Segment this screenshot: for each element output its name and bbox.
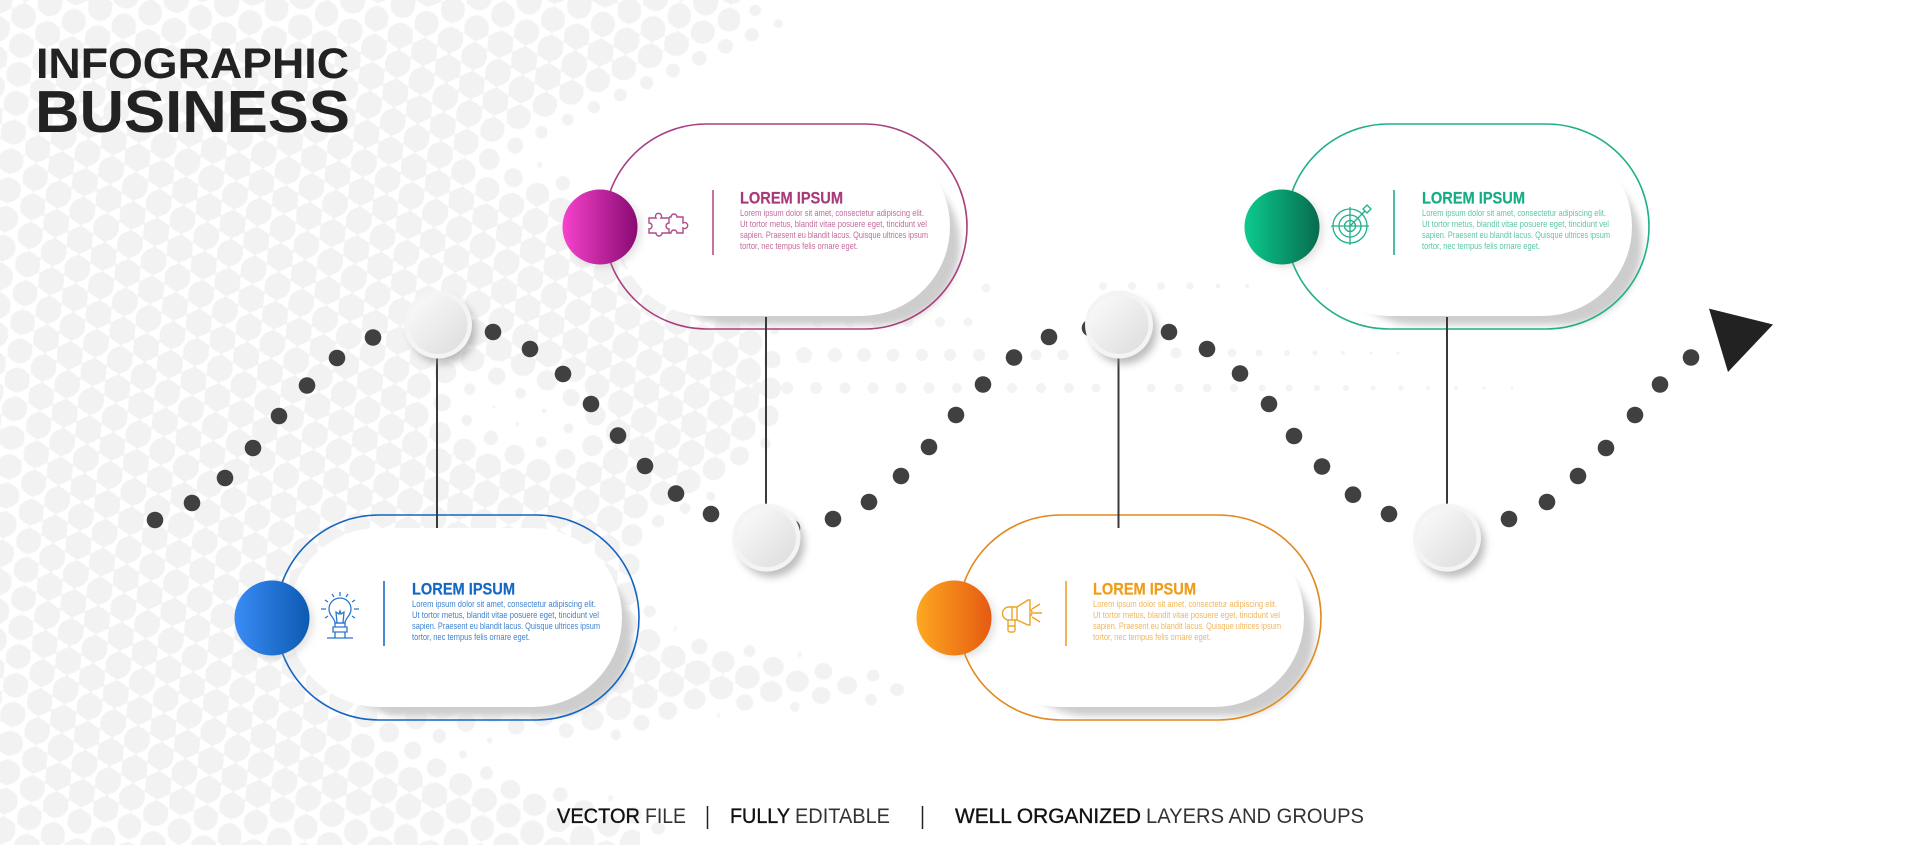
panel: blue card	[234, 515, 639, 720]
panel: blue card: Lorem ipsum dolor sit amet, consectetur adipiscing elit.	[412, 599, 596, 610]
title	[35, 41, 350, 145]
footer caption: LAYERS AND GROUPS	[1146, 805, 1364, 828]
panel: orange card: sapien. Praesent eu blandit lacus. Quisque ultrices ipsum	[1093, 621, 1281, 632]
panel: blue card: Ut tortor metus, blandit vitae posuere eget, tincidunt vel	[412, 610, 599, 621]
panel: green card: sapien. Praesent eu blandit lacus. Quisque ultrices ipsum	[1422, 230, 1610, 241]
footer caption: VECTOR	[557, 805, 640, 828]
panel: orange card: LOREM IPSUM	[1093, 580, 1196, 598]
arrow head	[1709, 309, 1773, 372]
timeline node 1	[404, 290, 476, 364]
panel: orange card	[916, 515, 1321, 720]
connector lines	[437, 317, 1447, 528]
footer caption: EDITABLE	[795, 805, 890, 828]
footer caption: FULLY	[730, 805, 790, 828]
panel: pink card: Ut tortor metus, blandit vitae posuere eget, tincidunt vel	[740, 219, 927, 230]
panel: green card: LOREM IPSUM	[1422, 188, 1525, 208]
panel: pink card: LOREM IPSUM	[740, 188, 843, 208]
panel: blue card: LOREM IPSUM	[412, 580, 515, 598]
center halftone rows	[721, 282, 1514, 394]
dotted path	[147, 320, 1699, 536]
panel: pink card: sapien. Praesent eu blandit lacus. Quisque ultrices ipsum	[740, 230, 928, 241]
footer caption: FILE	[645, 805, 686, 828]
panel: green card	[1244, 124, 1649, 329]
panel: blue card: tortor, nec tempus felis ornare eget.	[412, 632, 530, 643]
timeline node 3	[1085, 290, 1157, 364]
panel: pink card: Lorem ipsum dolor sit amet, consectetur adipiscing elit.	[740, 208, 924, 219]
panel: orange card: Lorem ipsum dolor sit amet, consectetur adipiscing elit.	[1093, 599, 1277, 610]
panel: pink card	[562, 124, 967, 329]
timeline node 2	[732, 504, 804, 577]
panel: green card: Lorem ipsum dolor sit amet, consectetur adipiscing elit.	[1422, 208, 1606, 219]
footer caption: WELL ORGANIZED	[955, 805, 1141, 828]
title: INFOGRAPHIC	[36, 41, 349, 88]
panel: blue card: sapien. Praesent eu blandit lacus. Quisque ultrices ipsum	[412, 621, 600, 632]
timeline node 4	[1413, 504, 1485, 577]
panel: orange card: tortor, nec tempus felis ornare eget.	[1093, 632, 1211, 643]
panel: green card: Ut tortor metus, blandit vitae posuere eget, tincidunt vel	[1422, 219, 1609, 230]
panel: orange card: Ut tortor metus, blandit vitae posuere eget, tincidunt vel	[1093, 610, 1280, 621]
footer caption	[557, 805, 1364, 829]
panel: green card: tortor, nec tempus felis ornare eget.	[1422, 241, 1540, 252]
title: BUSINESS	[35, 79, 350, 145]
panel: pink card: tortor, nec tempus felis ornare eget.	[740, 241, 858, 252]
